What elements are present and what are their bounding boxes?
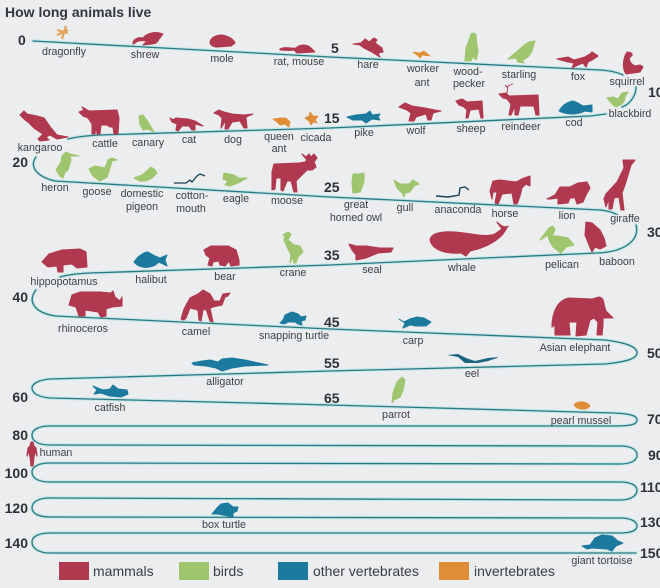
animal: dragonfly: dragonfly [42, 46, 87, 58]
animal: shrew: shrew [131, 49, 160, 61]
age scale numbers: 5 [331, 40, 339, 56]
animal: worker ant: worker [406, 63, 439, 75]
animal: queen ant: queen [264, 131, 294, 143]
animal: moose [271, 154, 317, 207]
animal: moose: moose [271, 195, 303, 207]
animal: cod [559, 101, 592, 129]
animal: starling [502, 41, 536, 81]
animal: crane: crane [280, 267, 306, 279]
animal: mole [210, 35, 235, 65]
animal: anaconda [435, 187, 482, 216]
legend: mammals: mammals [93, 563, 154, 579]
age scale numbers: 15 [324, 110, 340, 126]
animal: cicada [301, 112, 331, 144]
animal: cattle: cattle [92, 138, 118, 150]
animal: blackbird [607, 92, 651, 120]
animal: carp: carp [403, 335, 423, 347]
animal: fox [557, 52, 598, 83]
age scale numbers: 40 [12, 289, 28, 305]
animal: reindeer [499, 84, 541, 133]
animal: Asian elephant [540, 297, 613, 354]
animal: kangaroo [18, 111, 68, 154]
animal: cottonmouth: cotton- [176, 190, 209, 202]
animal: worker ant: ant [415, 77, 429, 89]
animal: cat: cat [182, 134, 196, 146]
animal: great horned owl: great [344, 199, 368, 211]
animal: canary: canary [132, 137, 165, 149]
animal: wolf: wolf [405, 125, 426, 137]
animal: great horned owl: horned owl [330, 212, 382, 224]
animal: gull [394, 180, 419, 214]
animal: Asian elephant: Asian elephant [540, 342, 610, 354]
legend: invertebrates: invertebrates [474, 563, 555, 579]
animal: eagle [223, 173, 249, 205]
age scale numbers: 55 [324, 355, 340, 371]
animal: whale: whale [447, 262, 476, 274]
animal: lion: lion [559, 210, 575, 222]
animal: canary [132, 115, 165, 149]
title: How long animals live [5, 4, 151, 20]
animal: pelican: pelican [545, 259, 579, 271]
animal: snapping turtle: snapping turtle [259, 330, 329, 342]
animal: dragonfly [42, 26, 87, 58]
animal: heron: heron [41, 182, 69, 194]
animal: domestic pigeon: domestic [121, 188, 164, 200]
animal: pearl mussel [551, 402, 611, 427]
animal: lion [547, 182, 590, 222]
animal: parrot [382, 377, 410, 421]
animal: domestic pigeon [121, 167, 164, 213]
animal: eel [447, 354, 498, 380]
animal: baboon [585, 222, 635, 268]
animal: carp [399, 317, 431, 347]
age scale numbers: 80 [12, 427, 28, 443]
age scale numbers: 35 [324, 247, 340, 263]
animal: cottonmouth [174, 174, 209, 215]
age scale numbers: 120 [5, 500, 28, 516]
animal: queen ant [264, 118, 294, 155]
animal: mole: mole [210, 53, 234, 65]
animal: rat, mouse: rat, mouse [274, 56, 324, 68]
animal: pike: pike [354, 127, 374, 139]
animal: horse [490, 176, 530, 220]
animal: giant tortoise: giant tortoise [571, 555, 633, 567]
animal: halibut [134, 252, 167, 286]
animal: catfish: catfish [95, 402, 125, 414]
animal: rhinoceros [58, 291, 122, 335]
animal: woodpecker: wood- [452, 66, 483, 78]
legend [59, 562, 555, 580]
legend: birds [179, 562, 243, 580]
animal: reindeer: reindeer [501, 121, 541, 133]
animal: pike [347, 111, 380, 139]
animal: gull: gull [397, 202, 413, 214]
animal: seal [349, 244, 393, 276]
animal: rhinoceros: rhinoceros [58, 323, 108, 335]
animal: dog [214, 110, 253, 146]
animal: cottonmouth: mouth [176, 203, 206, 215]
animal: fox: fox [571, 71, 586, 83]
animal: crane [280, 232, 306, 279]
animal: cod: cod [565, 117, 583, 129]
age scale numbers: 100 [5, 465, 28, 481]
animal: goose: goose [82, 186, 112, 198]
timeline: serpentine lifespan line [32, 41, 637, 553]
animal: box turtle [202, 503, 246, 531]
animal: giraffe: giraffe [610, 213, 640, 225]
animal: hare [353, 38, 383, 71]
legend: other vertebrates: other vertebrates [313, 563, 419, 579]
animal: starling: starling [502, 69, 536, 81]
animal: giraffe [604, 160, 640, 225]
animal: horse: horse [492, 208, 518, 220]
animal: rat, mouse [274, 45, 324, 68]
animal: alligator [192, 358, 268, 388]
animal: blackbird: blackbird [609, 108, 651, 120]
animal: catfish [93, 385, 128, 414]
animal: baboon: baboon [599, 256, 635, 268]
animal: cicada: cicada [301, 132, 331, 144]
age scale numbers: 140 [5, 535, 28, 551]
age scale numbers: 0 [18, 32, 26, 48]
animal: great horned owl [330, 173, 382, 224]
animal: camel [181, 290, 230, 338]
animal: kangaroo: kangaroo [18, 142, 62, 154]
age scale numbers: 20 [12, 154, 28, 170]
animal: bear [204, 246, 239, 283]
animal: woodpecker [452, 33, 485, 90]
animal: halibut: halibut [135, 274, 167, 286]
animal: eel: eel [465, 368, 479, 380]
animal: cattle [79, 107, 119, 150]
animal: squirrel: squirrel [609, 76, 645, 88]
age scale numbers: 60 [12, 389, 28, 405]
animal: human: human [40, 447, 72, 459]
animal: dog: dog [224, 134, 242, 146]
animal: squirrel [609, 52, 645, 88]
animal: hippopotamus [30, 249, 98, 288]
animal: goose [82, 158, 117, 198]
age scale numbers: 65 [324, 390, 340, 406]
animal: heron [41, 152, 79, 194]
age scale numbers: 25 [324, 179, 340, 195]
animal: shrew [131, 33, 163, 61]
animal: wolf [399, 103, 441, 137]
animal: domestic pigeon: pigeon [126, 201, 158, 213]
legend: birds: birds [213, 563, 243, 579]
animal: pearl mussel: pearl mussel [551, 415, 611, 427]
animal: snapping turtle [259, 312, 329, 342]
animal: bear: bear [214, 271, 236, 283]
animal: box turtle: box turtle [202, 519, 246, 531]
animal: eagle: eagle [223, 193, 249, 205]
animal: seal: seal [362, 264, 382, 276]
animal: alligator: alligator [206, 376, 244, 388]
animal: giant tortoise [571, 535, 633, 567]
age scale numbers: 45 [324, 314, 340, 330]
legend: other vertebrates [278, 562, 419, 580]
animal: parrot: parrot [382, 409, 410, 421]
animal: hare: hare [357, 59, 379, 71]
legend: mammals [59, 562, 154, 580]
animal: hippopotamus: hippopotamus [30, 276, 98, 288]
animal: sheep [456, 99, 486, 135]
animal: worker ant [406, 51, 439, 89]
animal: anaconda: anaconda [435, 204, 482, 216]
animal: queen ant: ant [272, 143, 286, 155]
animal: sheep: sheep [456, 123, 486, 135]
animal: camel: camel [182, 326, 210, 338]
animal: human [27, 442, 72, 466]
animal: woodpecker: pecker [453, 78, 485, 90]
animal: pelican [540, 226, 579, 271]
legend: invertebrates [439, 562, 555, 580]
animal: cat [170, 118, 203, 146]
animal: whale [430, 222, 508, 274]
